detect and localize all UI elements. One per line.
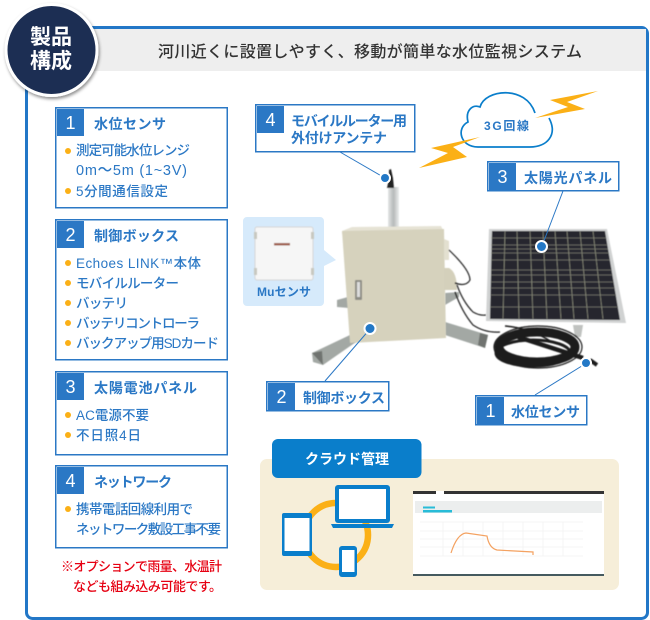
callout: 4 mobile router antenna: モバイルルーター用 [291, 113, 407, 129]
panel: solar cell panel: 3 [65, 377, 76, 397]
panel: control box: バッテリ [76, 296, 128, 311]
cables [449, 250, 500, 332]
panel: water level sensor: 水位センサ [94, 116, 166, 132]
panel: network: ネットワーク敷設工事不要 [76, 521, 221, 537]
callout: 1 water level sensor: 水位センサ [511, 404, 580, 420]
cloud: 3G line: 3G回線 [484, 118, 529, 133]
panel: control box: バックアップ用SDカード [76, 336, 219, 351]
dashboard screenshot [413, 491, 604, 576]
icon: lightning upper [535, 91, 598, 118]
callout: 4 mobile router antenna: 外付けアンテナ [291, 130, 387, 146]
panel: control box: バッテリコントローラ [76, 316, 200, 331]
tab: cloud management heading [272, 439, 422, 478]
callout: 3 solar panel: 3 [497, 167, 508, 187]
panel: water level sensor: 1 [65, 113, 76, 133]
water level sensor cable coil [494, 326, 597, 368]
tab: cloud management heading: クラウド管理 [305, 451, 389, 467]
callout: 2 control box [267, 323, 389, 411]
panel: control box: 2 [65, 225, 76, 245]
callout: 4 mobile router antenna: 4 [265, 110, 276, 130]
panel: network: ネットワーク [94, 474, 172, 490]
panel: water level sensor [56, 108, 227, 208]
panel: control box: モバイルルーター [76, 276, 179, 291]
control box enclosure [342, 226, 457, 343]
badge: product configuration [6, 4, 97, 96]
mounting feet [312, 292, 488, 365]
option note: なども組み込み可能です。 [73, 579, 222, 594]
panel: control box [56, 220, 227, 360]
panel: solar cell panel: 不日照4日 [76, 428, 141, 443]
sensor popup: Mu sensor [243, 217, 336, 306]
badge: product configuration: 製品 [30, 26, 72, 49]
icon: lightning lower [419, 137, 480, 168]
icon: connected devices [282, 485, 394, 577]
option note: ※オプションで雨量、水温計 [61, 559, 222, 574]
antenna [387, 169, 399, 228]
solar panel [486, 229, 626, 337]
callout: 1 water level sensor: 1 [485, 401, 496, 421]
panel: control box: 制御ボックス [94, 228, 179, 244]
option note [61, 559, 222, 594]
panel: solar cell panel: AC電源不要 [76, 408, 149, 423]
callout: 1 water level sensor [476, 358, 591, 425]
panel: water level sensor: 0m～5m (1~3V) [76, 163, 187, 179]
panel: network: 4 [65, 471, 76, 491]
panel: solar cell panel [56, 372, 227, 455]
sensor popup: Mu sensor: Muセンサ [257, 285, 311, 299]
badge: product configuration: 構成 [30, 49, 72, 73]
title: 河川近くに設置しやすく、移動が簡単な水位監視システム [158, 42, 582, 61]
cloud: 3G line [461, 93, 552, 147]
panel: network [56, 466, 227, 548]
callout: 4 mobile router antenna [256, 105, 415, 183]
callout: 3 solar panel: 太陽光パネル [524, 170, 612, 186]
panel: control box: Echoes LINK™本体 [76, 256, 202, 271]
panel: water level sensor: 5分間通信設定 [76, 184, 168, 199]
header band [28, 29, 646, 71]
panel: water level sensor: 測定可能水位レンジ [76, 143, 190, 158]
panel: cloud management [260, 459, 619, 590]
panel: solar cell panel: 太陽電池パネル [94, 380, 197, 396]
callout: 2 control box: 制御ボックス [303, 390, 385, 406]
panel: network: 携帯電話回線利用で [76, 501, 193, 517]
callout: 3 solar panel [488, 162, 619, 252]
callout: 2 control box: 2 [276, 387, 287, 407]
